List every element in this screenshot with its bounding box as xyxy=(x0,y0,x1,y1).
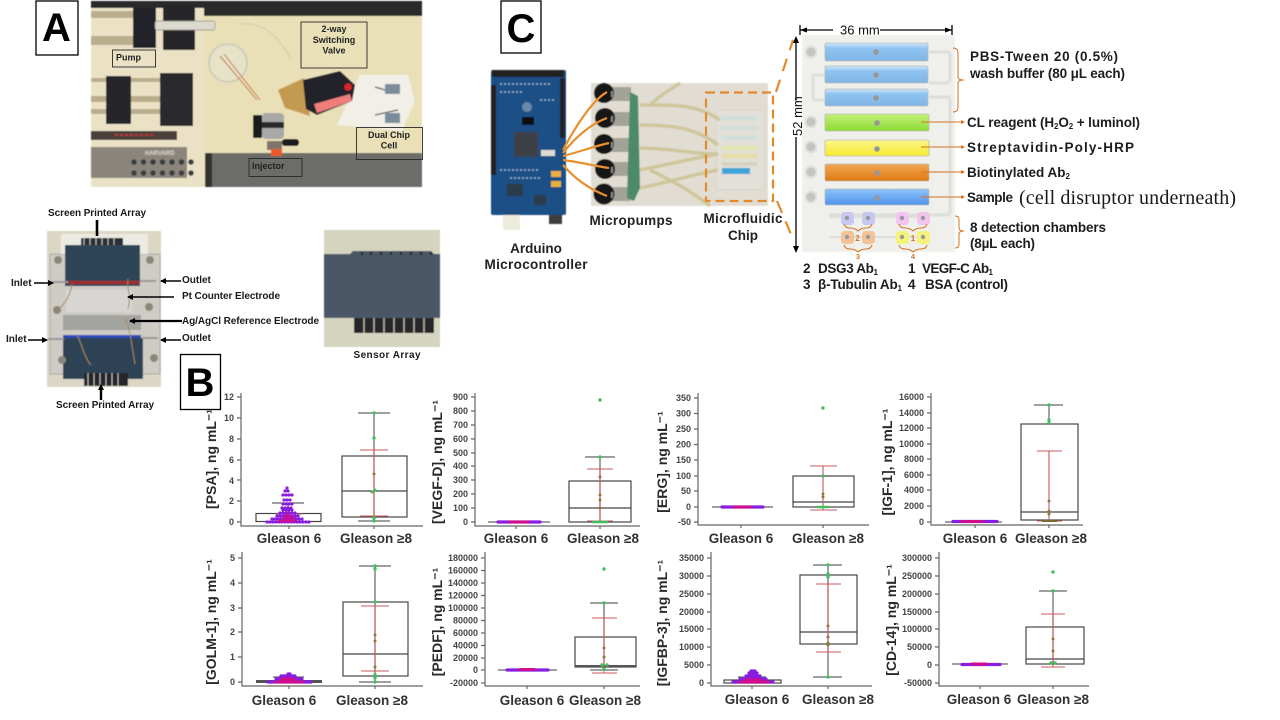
detection chambers xyxy=(829,212,930,261)
leader: Sample: Sample xyxy=(967,190,1013,205)
leader: Sample: (cell disruptor underneath) xyxy=(1019,187,1236,209)
leader: detection chambers: 8 detection chambers xyxy=(970,220,1106,235)
chart: VEGF-D: 200 xyxy=(453,489,468,499)
chart: CD-14: -50000 xyxy=(904,678,932,688)
leader: Biotinylated Ab2 xyxy=(921,165,1071,181)
chart: ERG: 150 xyxy=(676,455,691,465)
panel A: flow system photo xyxy=(91,1,422,187)
chart: GOLM-1: Gleason 6 xyxy=(252,693,317,708)
callout: outlet upper xyxy=(161,275,212,286)
chart: ERG: -50 xyxy=(678,517,691,527)
dimension: 36 mm xyxy=(800,22,952,38)
legend: antibodies: 2 xyxy=(803,261,811,276)
chart: PEDF: 60000 xyxy=(453,628,478,638)
chart: IGF-1: 10000 xyxy=(899,439,924,449)
chart: IGF-1: 0 xyxy=(919,517,924,527)
chart: PEDF: 160000 xyxy=(448,566,478,576)
chart: ERG: Gleason 6 xyxy=(709,531,774,546)
chart: CD-14: 0 xyxy=(927,660,932,670)
caption: Microfluidic Chip: Microfluidic xyxy=(704,211,783,226)
chart: VEGF-D: 900 xyxy=(453,392,468,402)
callout: screen printed array bottom xyxy=(56,385,154,411)
chart: CD-14: [CD-14], ng mL⁻¹ xyxy=(883,564,899,676)
caption: Microfluidic Chip xyxy=(704,211,783,243)
chart: VEGF-D: 400 xyxy=(453,461,468,471)
chart: CD-14: 300000 xyxy=(902,553,932,563)
leader: PBS-Tween brace: PBS-Tween 20 (0.5%) xyxy=(970,49,1118,64)
chart: VEGF-D: [VEGF-D], ng mL⁻¹ xyxy=(429,400,445,524)
chart: CD-14: Gleason 6 xyxy=(947,692,1012,707)
chart: GOLM-1: 1 xyxy=(230,652,235,662)
leader: detection chambers xyxy=(955,216,1106,251)
photo of electrode cell xyxy=(47,231,161,387)
legend: antibodies xyxy=(803,261,1008,293)
chart: VEGF-D: 100 xyxy=(453,503,468,513)
chart: ERG: 300 xyxy=(676,408,691,418)
chart: CD-14: 50000 xyxy=(907,642,932,652)
chart: VEGF-D: 500 xyxy=(453,448,468,458)
chart: PEDF: 100000 xyxy=(448,603,478,613)
chart: VEGF-D: 300 xyxy=(453,475,468,485)
caption: Arduino Microcontroller: Microcontroller xyxy=(484,257,588,272)
chart: GOLM-1: 4 xyxy=(230,578,235,588)
chart: PEDF: 80000 xyxy=(453,616,478,626)
panel B: biomarker box plots xyxy=(203,392,1089,708)
panel label C: C xyxy=(507,7,535,51)
callout: screen printed array top: Screen Printed Array xyxy=(48,208,146,219)
caption: Microfluidic Chip: Chip xyxy=(728,228,758,243)
chart: GOLM-1: 2 xyxy=(230,627,235,637)
chart: CD-14: 150000 xyxy=(902,607,932,617)
leader: Biotinylated Ab2: Biotinylated Ab xyxy=(967,165,1066,180)
legend: antibodies: 1 xyxy=(908,261,916,276)
caption: Arduino Microcontroller xyxy=(484,241,588,272)
leader: Sample xyxy=(921,187,1236,209)
chart: PSA: 4 xyxy=(229,476,234,486)
chart: GOLM-1: 5 xyxy=(230,553,235,563)
reagent chambers xyxy=(825,43,929,205)
chart: IGF-1: 14000 xyxy=(899,408,924,418)
chart: VEGF-D: Gleason ≥8 xyxy=(567,531,639,546)
callout: inlet lower xyxy=(6,334,47,345)
chart: GOLM-1: Gleason ≥8 xyxy=(336,693,408,708)
callout: outlet upper: Outlet xyxy=(182,275,212,286)
chart: GOLM-1: 0 xyxy=(230,677,235,687)
chart: PSA: Gleason ≥8 xyxy=(340,531,412,546)
chart: VEGF-D: Gleason 6 xyxy=(484,531,549,546)
chart: IGFBP-3: 25000 xyxy=(679,589,704,599)
chart: ERG: 350 xyxy=(676,393,691,403)
chart: PEDF: Gleason 6 xyxy=(500,693,565,708)
chart: VEGF-D xyxy=(429,392,640,546)
chart: PEDF: 20000 xyxy=(453,653,478,663)
chart: IGF-1: Gleason 6 xyxy=(943,531,1008,546)
chart: PSA: 2 xyxy=(229,496,234,506)
chart: PSA: 10 xyxy=(224,413,234,423)
dashed box: microfluidic chip xyxy=(706,40,793,239)
caption: Micropumps: Micropumps xyxy=(590,213,672,228)
label: pump xyxy=(112,50,156,67)
chart: PSA: 6 xyxy=(229,455,234,465)
panel label B: B xyxy=(186,361,214,405)
chart: IGFBP-3: 30000 xyxy=(679,571,704,581)
chart: IGFBP-3: 15000 xyxy=(679,624,704,634)
callout: outlet lower xyxy=(161,333,212,344)
dimension: 36 mm: 36 mm xyxy=(840,22,880,38)
chart: IGF-1: 16000 xyxy=(899,392,924,402)
serpentine channels xyxy=(813,52,950,215)
detection chambers: 3 xyxy=(856,252,860,261)
chart: CD-14: 100000 xyxy=(902,624,932,634)
chart: GOLM-1: [GOLM-1], ng mL⁻¹ xyxy=(203,559,219,685)
legend: antibodies: 3 xyxy=(803,277,811,292)
legend: antibodies: β-Tubulin Ab xyxy=(818,277,898,292)
chart: IGFBP-3: 10000 xyxy=(679,642,704,652)
chart: IGFBP-3 xyxy=(654,552,874,707)
board photo xyxy=(491,70,566,230)
chart: PEDF: Gleason ≥8 xyxy=(569,693,641,708)
chart: IGFBP-3: Gleason 6 xyxy=(725,692,790,707)
leader: Biotinylated Ab2: 2 xyxy=(1066,172,1071,181)
chart: ERG: 100 xyxy=(676,471,691,481)
chart: IGFBP-3: 5000 xyxy=(684,660,704,670)
chart: IGF-1 xyxy=(879,392,1087,546)
leader: detection chambers: (8µL each) xyxy=(970,236,1035,251)
legend: antibodies: BSA (control) xyxy=(925,277,1008,292)
chart: ERG: Gleason ≥8 xyxy=(792,531,864,546)
sensor array photo xyxy=(324,230,440,361)
callout: Ag/AgCl reference electrode: Ag/AgCl Reference Electrode xyxy=(182,316,319,327)
panel label A xyxy=(36,1,78,55)
caption: Arduino Microcontroller: Arduino xyxy=(510,241,562,256)
panel label C xyxy=(501,1,541,53)
chart: IGF-1: Gleason ≥8 xyxy=(1015,531,1087,546)
callout: screen printed array top xyxy=(48,208,146,236)
caption: sensor array: Sensor Array xyxy=(354,350,421,361)
chart: ERG: 200 xyxy=(676,440,691,450)
callout: screen printed array bottom: Screen Printed Array xyxy=(56,400,154,411)
chart: GOLM-1: 3 xyxy=(230,603,235,613)
chart: PEDF: 0 xyxy=(473,665,478,675)
chart: IGF-1: 8000 xyxy=(904,454,924,464)
leader: CL reagent xyxy=(921,115,1140,131)
label: switching valve xyxy=(301,22,367,68)
chart: IGF-1: 12000 xyxy=(899,423,924,433)
chart: ERG: 0 xyxy=(686,502,691,512)
detection chambers: 2 xyxy=(855,234,860,243)
legend: antibodies: 1 xyxy=(874,268,879,277)
leader: CL reagent: 2 xyxy=(1069,122,1074,131)
label: switching valve: 2-way xyxy=(321,24,347,34)
chart: CD-14: 250000 xyxy=(902,571,932,581)
chart: VEGF-D: 0 xyxy=(463,517,468,527)
callout: outlet lower: Outlet xyxy=(182,333,212,344)
leader: CL reagent: CL reagent (H xyxy=(967,115,1054,130)
wells xyxy=(806,46,816,202)
chart: IGF-1: 2000 xyxy=(904,501,924,511)
chart: CD-14: 200000 xyxy=(902,589,932,599)
chart: GOLM-1 xyxy=(203,552,423,708)
label: dual chip cell xyxy=(356,128,422,160)
chart: PSA xyxy=(203,392,423,546)
chart: IGFBP-3: 0 xyxy=(699,678,704,688)
chart: PEDF: [PEDF], ng mL⁻¹ xyxy=(429,567,445,676)
leader: CL reagent: O xyxy=(1058,115,1069,130)
chart: PSA: 8 xyxy=(229,434,234,444)
chip plate xyxy=(802,35,955,252)
photo background and benchtop: HARVARD xyxy=(145,151,175,157)
chart: PSA: 0 xyxy=(229,517,234,527)
callout: Pt counter electrode: Pt Counter Electrode xyxy=(182,291,280,302)
legend: antibodies: 4 xyxy=(908,277,916,292)
panel C: chip schematic xyxy=(790,22,1236,293)
callout: inlet upper: Inlet xyxy=(11,278,32,289)
chart: CD-14: Gleason ≥8 xyxy=(1017,692,1089,707)
chart: PSA: Gleason 6 xyxy=(257,531,322,546)
chart: PSA: [PSA], ng mL⁻¹ xyxy=(203,409,219,509)
chart: IGF-1: 4000 xyxy=(904,485,924,495)
legend: antibodies: VEGF-C Ab xyxy=(922,261,989,276)
legend: antibodies: 1 xyxy=(989,268,994,277)
label: dual chip cell: Cell xyxy=(381,140,397,150)
chart: IGFBP-3: 20000 xyxy=(679,607,704,617)
legend: antibodies: DSG3 Ab xyxy=(818,261,874,276)
orange connection wires xyxy=(563,92,609,196)
leader: PBS-Tween brace: wash buffer (80 μL each) xyxy=(969,66,1125,81)
chart: VEGF-D: 600 xyxy=(453,434,468,444)
chart: IGFBP-3: 35000 xyxy=(679,553,704,563)
chart: PEDF xyxy=(429,552,641,708)
chart: PEDF: 180000 xyxy=(448,553,478,563)
chart: IGFBP-3: [IGFBP-3], ng mL⁻¹ xyxy=(654,559,670,686)
chart: IGFBP-3: Gleason ≥8 xyxy=(802,692,874,707)
label: injector: Injector xyxy=(252,161,285,171)
chart: ERG xyxy=(654,393,869,546)
chart: VEGF-D: 800 xyxy=(453,406,468,416)
leader: Streptavidin-Poly-HRP: Streptavidin-Poly-HRP xyxy=(967,140,1134,155)
panel C: Arduino microcontroller xyxy=(484,70,588,272)
chart: ERG: 50 xyxy=(681,486,691,496)
photo background and benchtop xyxy=(91,1,422,187)
label: switching valve: Valve xyxy=(322,46,346,56)
legend: antibodies: 1 xyxy=(898,284,903,293)
label: dual chip cell: Dual Chip xyxy=(368,130,411,140)
detection chambers: 1 xyxy=(911,234,916,243)
leader: PBS-Tween brace xyxy=(953,48,1125,112)
panel label A: A xyxy=(42,6,71,50)
chart: PEDF: 120000 xyxy=(448,590,478,600)
label: switching valve: Switching xyxy=(313,35,355,45)
chart: VEGF-D: 700 xyxy=(453,420,468,430)
leader: CL reagent: 2 xyxy=(1054,122,1059,131)
chart: CD-14 xyxy=(883,552,1089,707)
chart: PEDF: -20000 xyxy=(450,678,478,688)
callout: inlet upper xyxy=(11,278,53,289)
panel A: dual chip cell photo with callouts xyxy=(6,208,319,411)
callout: inlet lower: Inlet xyxy=(6,334,27,345)
dimension: 52 mm xyxy=(790,36,805,253)
chart: ERG: [ERG], ng mL⁻¹ xyxy=(654,411,670,513)
label: pump: Pump xyxy=(116,52,142,62)
label: injector xyxy=(249,158,302,176)
panel label B xyxy=(180,354,220,410)
chart: PEDF: 140000 xyxy=(448,578,478,588)
panel C: micropumps and chip photo xyxy=(563,40,793,243)
chart: PEDF: 40000 xyxy=(453,640,478,650)
chart: ERG: 250 xyxy=(676,424,691,434)
detection chambers: 4 xyxy=(911,252,916,261)
leader: CL reagent: + luminol) xyxy=(1073,115,1140,130)
chart: IGF-1: [IGF-1], ng mL⁻¹ xyxy=(879,408,895,515)
chart: IGF-1: 6000 xyxy=(904,470,924,480)
chart: PSA: 12 xyxy=(224,392,234,402)
dimension: 52 mm: 52 mm xyxy=(790,96,805,136)
